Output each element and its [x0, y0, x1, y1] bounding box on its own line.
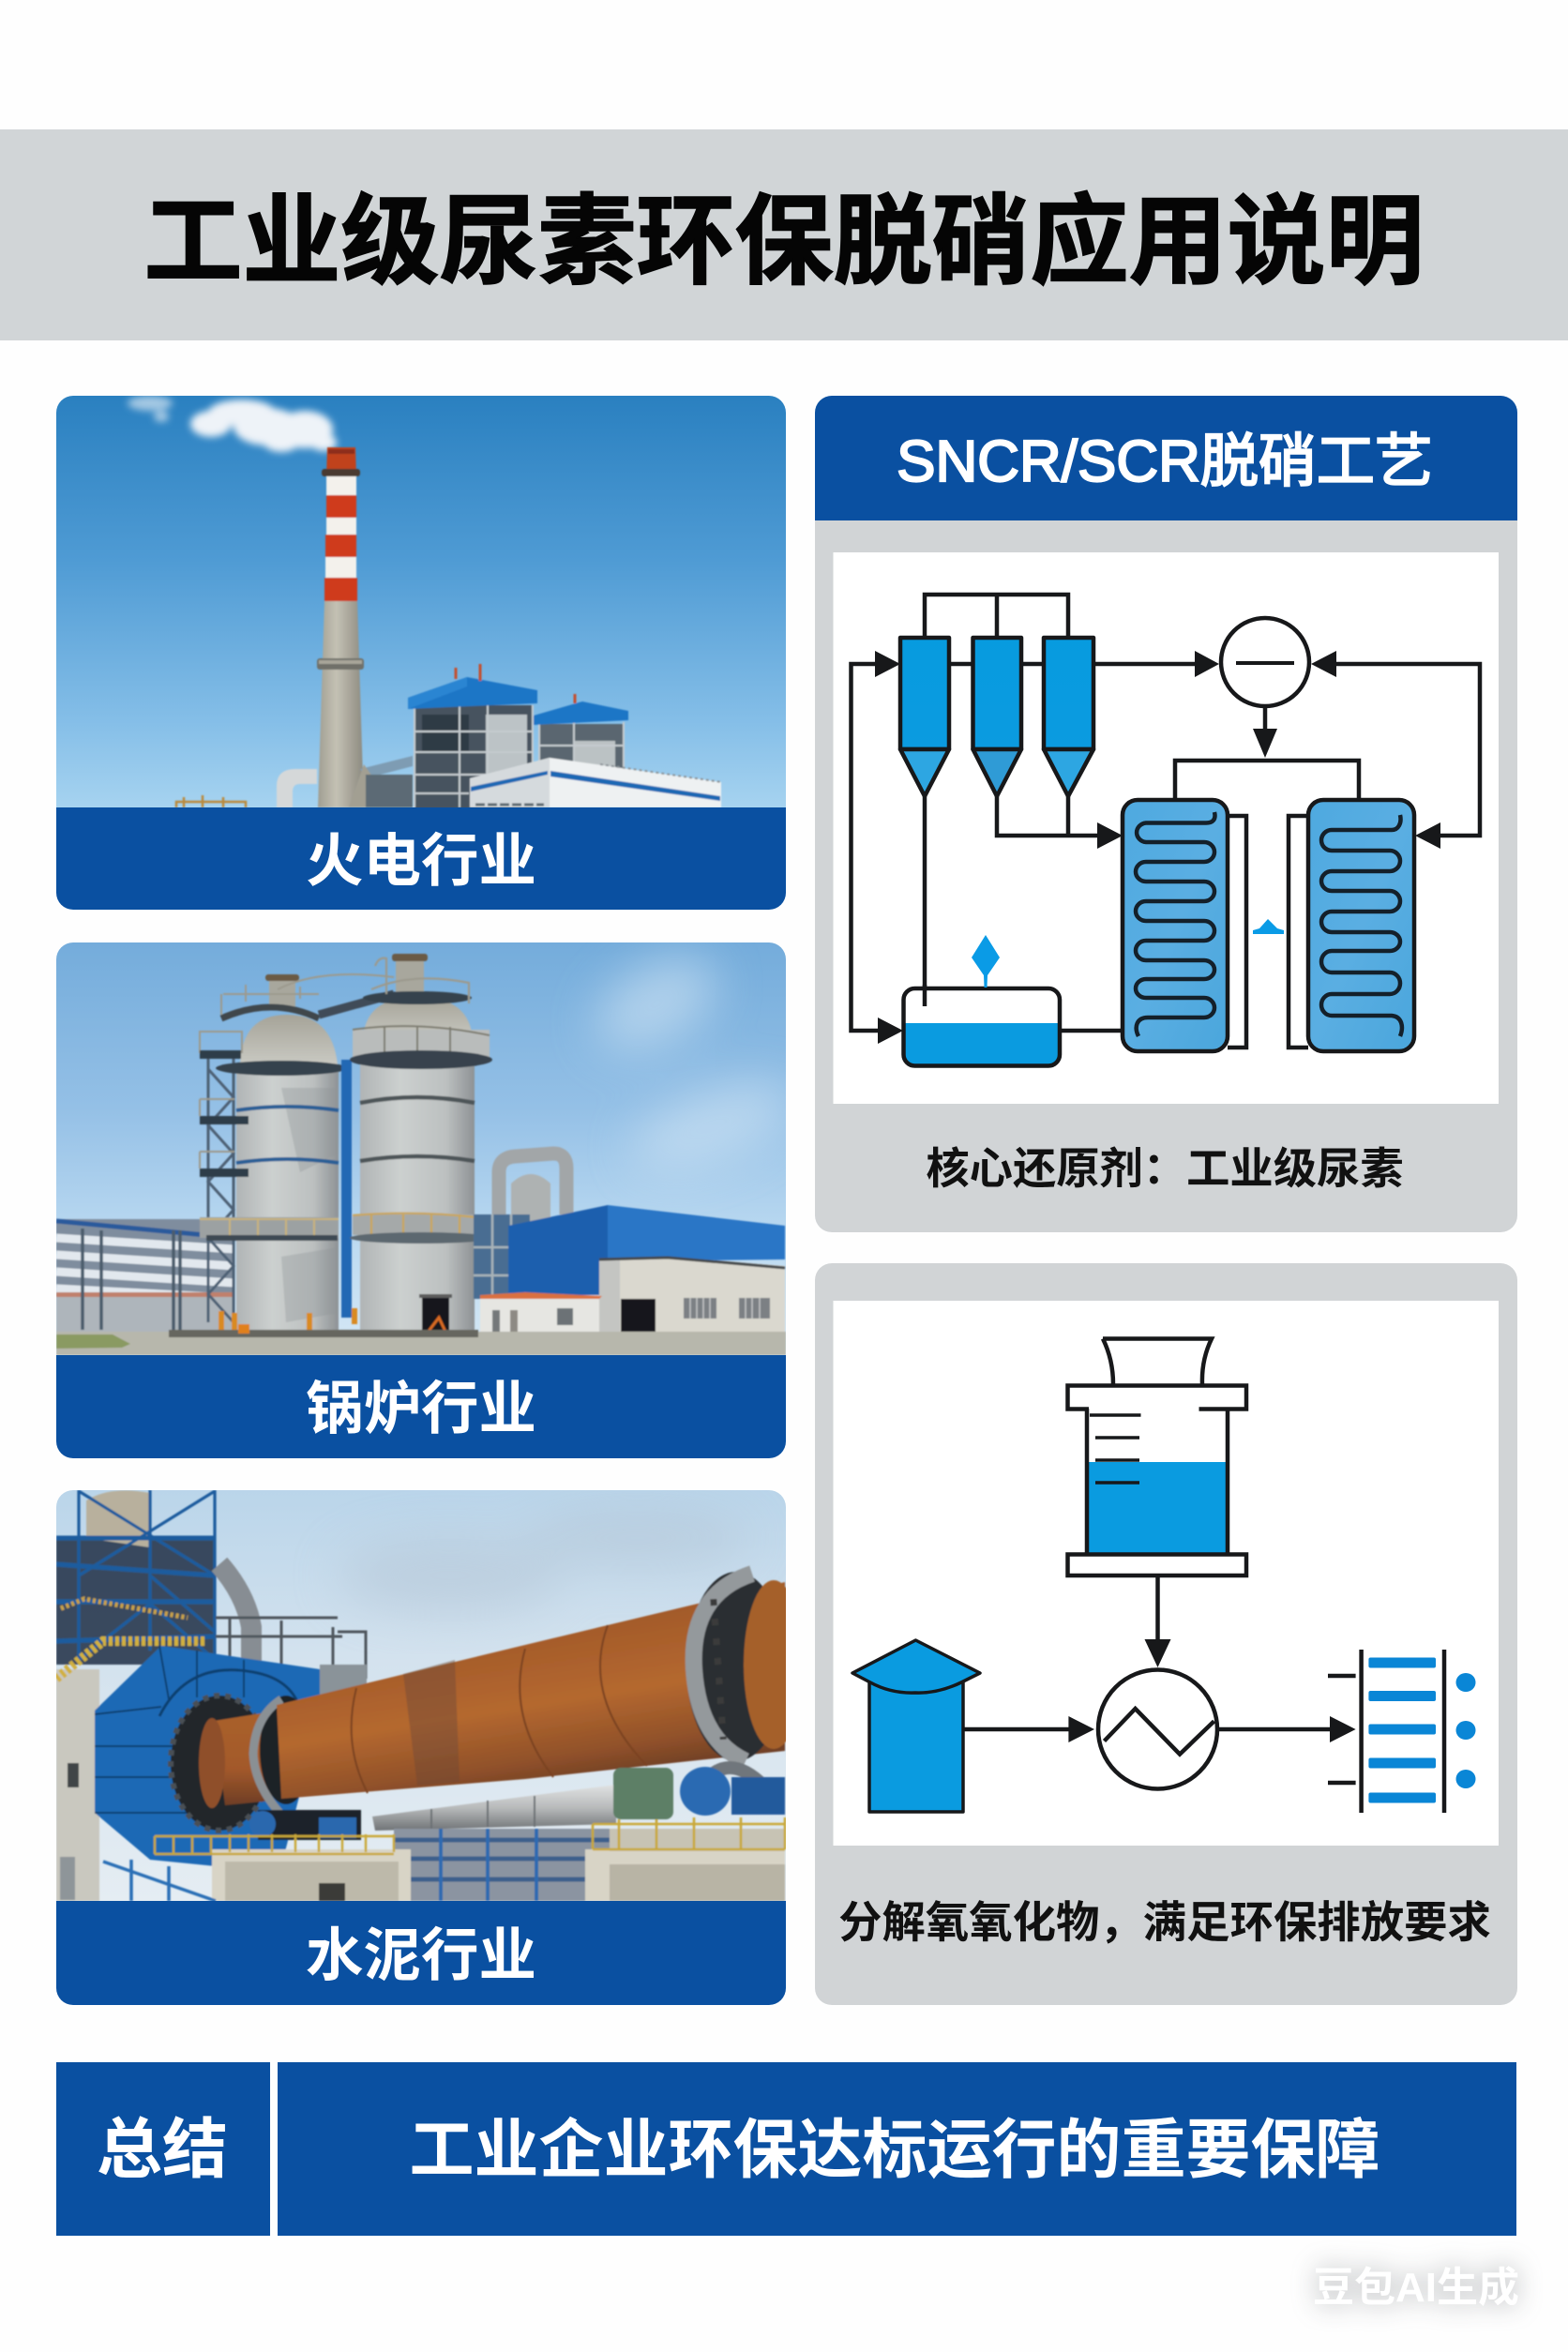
- panel: thermal power industry: [56, 396, 786, 910]
- caption bar: [56, 1901, 786, 2005]
- summary tag: [56, 2062, 270, 2236]
- panel: SNCR/SCR process: [815, 396, 1517, 1232]
- urea tank: [904, 985, 1060, 1065]
- caption bar: [56, 807, 786, 910]
- title: 工业级尿素环保脱硝应用说明: [143, 188, 1425, 297]
- label: thermal power: 火电行业: [306, 829, 536, 894]
- panel header: [815, 396, 1517, 520]
- panel: decomposition of nitrogen oxides: [815, 1263, 1517, 2005]
- heat exchanger circle: [1098, 1669, 1217, 1789]
- summary bar: [56, 2062, 1516, 2236]
- watermark: 豆包AI生成: [1313, 2265, 1519, 2311]
- label: cement: 水泥行业: [306, 1923, 536, 1988]
- panel heading: SNCR/SCR脱硝工艺: [897, 430, 1433, 494]
- arrowheads: [875, 651, 1440, 1044]
- diagram: urea decomposition: [833, 1301, 1499, 1846]
- pipes and feed lines: [852, 595, 1480, 1048]
- caption: core reductant: 核心还原剂：工业级尿素: [926, 1144, 1404, 1193]
- mixer circle: [1221, 618, 1309, 706]
- caption: emissions requirement: 分解氧氧化物，满足环保排放要求: [838, 1898, 1491, 1947]
- icon: droplet: [972, 935, 1000, 988]
- icon: small droplet cap: [1253, 919, 1284, 934]
- photo: power plant chimney: [56, 396, 786, 808]
- summary statement: 工业企业环保达标运行的重要保障: [409, 2114, 1380, 2186]
- panel: boiler industry: [56, 938, 804, 1458]
- label: boiler: 锅炉行业: [306, 1377, 536, 1441]
- photo: boiler towers: [56, 938, 804, 1355]
- panel: cement industry: [56, 1490, 804, 2005]
- silos: [900, 638, 1093, 796]
- diagram: denitrification process: [833, 552, 1499, 1104]
- photo: rotary kiln: [56, 1490, 804, 1903]
- caption bar: [56, 1355, 786, 1458]
- urea silo: [852, 1640, 980, 1812]
- filter stage: [1328, 1650, 1476, 1813]
- beaker with liquid: [1067, 1339, 1246, 1641]
- header band with title: [0, 129, 1568, 340]
- flow arrows: [963, 1639, 1356, 1742]
- summary statement: [278, 2062, 1516, 2236]
- watermark: 豆包AI生成: [1313, 2265, 1519, 2311]
- summary tag: 总结: [97, 2113, 228, 2186]
- reactors with coils: [1123, 800, 1414, 1051]
